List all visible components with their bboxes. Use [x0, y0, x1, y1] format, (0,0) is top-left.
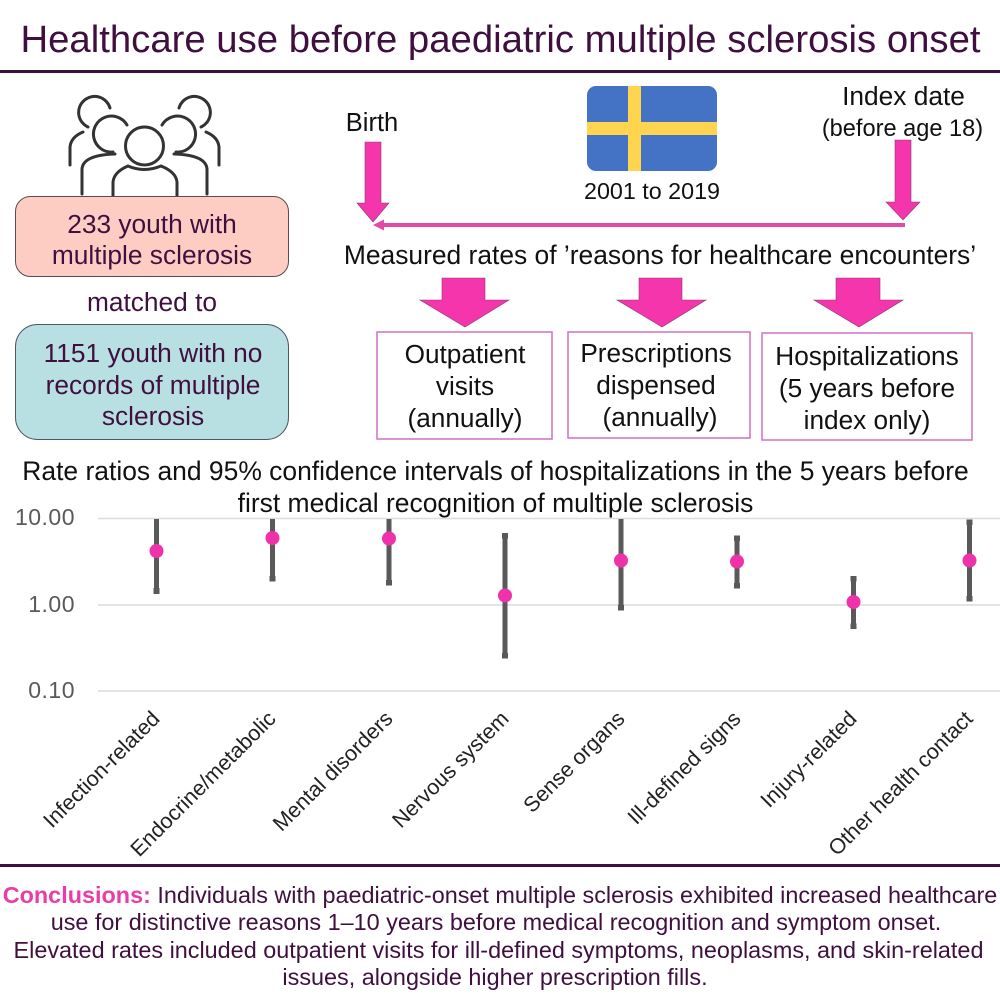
x axis labels: Nervous system: [388, 707, 514, 833]
y axis labels: 1.00: [28, 591, 75, 617]
box: prescriptions dispensed: (annually): [602, 402, 718, 432]
box: outpatient visits: Outpatient: [405, 339, 526, 369]
y axis labels: 10.00: [15, 504, 75, 530]
arrow: hospitalizations: [814, 278, 903, 327]
arrow: birth: [357, 142, 389, 222]
arrow: timeline: [373, 220, 905, 230]
chart heading: first medical recognition of multiple sclerosis: [238, 488, 753, 518]
box: youth with multiple sclerosis: [16, 196, 288, 276]
series: Mental disorders: [382, 519, 396, 586]
x axis labels: Endocrine/metabolic: [126, 706, 281, 861]
index date label: Index date: [842, 81, 965, 111]
subheading: measured rates: Measured rates of ’reasons for healthcare encounters’: [344, 240, 976, 270]
conclusions: issues, alongside higher prescription fills.: [282, 964, 708, 990]
x axis labels: Infection-related: [39, 707, 165, 833]
series: Infection-related: [150, 519, 164, 594]
title: Healthcare use before paediatric multiple sclerosis onset: [20, 18, 981, 61]
arrow: index date: [886, 140, 920, 220]
x axis labels: Injury-related: [756, 707, 862, 812]
box: prescriptions dispensed: [568, 332, 750, 438]
conclusions: Elevated rates included outpatient visits for ill-defined symptoms, neoplasms, and skin-related: [14, 937, 983, 963]
box: youth without multiple sclerosis: records of multiple: [46, 370, 260, 400]
box: hospitalizations: index only): [804, 405, 930, 435]
x axis labels: Ill-defined signs: [623, 707, 746, 829]
series: Nervous system: [498, 533, 512, 658]
series: Injury-related: [846, 576, 860, 629]
series: Other health contact: [962, 520, 976, 602]
conclusions: use for distinctive reasons 1–10 years before medical recognition and symptom onset.: [51, 909, 941, 935]
arrow: outpatient: [420, 278, 509, 327]
x axis labels: Mental disorders: [268, 707, 398, 836]
index date label: [822, 81, 983, 142]
series: Ill-defined signs: [730, 536, 744, 588]
matched to label: matched to: [87, 287, 217, 317]
index date label: (before age 18): [822, 116, 983, 142]
box: hospitalizations: Hospitalizations: [775, 341, 959, 371]
x axis labels: Other health contact: [824, 707, 978, 860]
box: prescriptions dispensed: dispensed: [596, 370, 716, 400]
icon: Swedish flag: [587, 86, 717, 171]
chart heading: Rate ratios and 95% confidence intervals of hospitalizations in the 5 years before: [22, 456, 969, 486]
birth label: Birth: [346, 109, 398, 137]
box: prescriptions dispensed: Prescriptions: [580, 338, 732, 368]
box: hospitalizations: [762, 333, 972, 440]
box: youth without multiple sclerosis: [16, 324, 288, 440]
series: Sense organs: [614, 519, 628, 610]
icon: group of people: [70, 96, 219, 196]
conclusions: Conclusions: Individuals with paediatric-onset multiple sclerosis exhibited increased healthcare: [3, 882, 997, 908]
series: Endocrine/metabolic: [266, 519, 280, 582]
x axis labels: [39, 706, 978, 861]
y axis labels: 0.10: [28, 677, 75, 703]
box: youth without multiple sclerosis: sclerosis: [102, 401, 204, 431]
chart: rate ratios: [15, 504, 1000, 861]
box: hospitalizations: (5 years before: [779, 373, 955, 403]
study period: 2001 to 2019: [584, 178, 720, 204]
box: youth with multiple sclerosis: 233 youth with: [67, 209, 237, 239]
y axis labels: [15, 504, 75, 703]
box: outpatient visits: (annually): [408, 403, 522, 433]
box: youth without multiple sclerosis: 1151 youth with no: [44, 338, 262, 368]
x axis labels: Sense organs: [519, 707, 630, 817]
box: outpatient visits: visits: [436, 371, 494, 401]
box: youth with multiple sclerosis: multiple sclerosis: [52, 240, 252, 270]
arrow: prescriptions: [617, 278, 706, 327]
box: outpatient visits: [377, 332, 552, 439]
